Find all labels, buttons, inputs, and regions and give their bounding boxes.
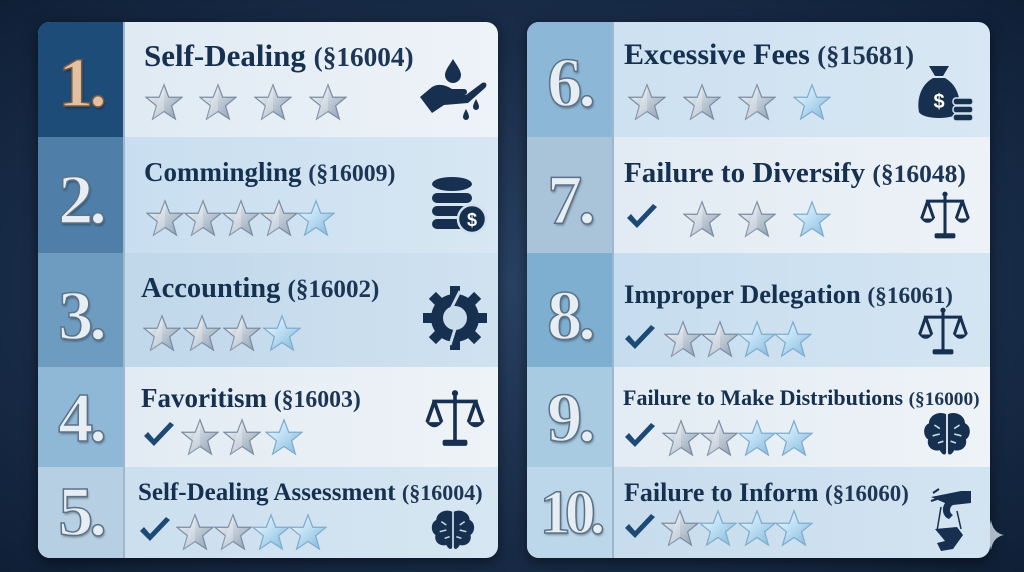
row 3: accounting: Accounting (§16002): [141, 273, 379, 304]
row 9: failure to make distributions: 9.: [547, 380, 592, 457]
row 9: failure to make distributions: [527, 367, 990, 467]
row 4: favoritism: [38, 367, 498, 467]
panel: left list: [38, 22, 498, 558]
row 1: self-dealing: [38, 22, 498, 137]
row 5: self-dealing assessment: 5.: [58, 474, 103, 551]
row 5: self-dealing assessment: Self-Dealing Assessment (§16004): [138, 479, 483, 506]
row 10: failure to inform: [527, 467, 990, 558]
row 8: improper delegation: [527, 253, 990, 367]
row 2: commingling: $: [467, 210, 477, 230]
row 5: self-dealing assessment: [38, 467, 498, 558]
row 3: accounting: 3.: [58, 278, 103, 355]
row 2: commingling: Commingling (§16009): [144, 157, 395, 187]
row 6: excessive fees: 6.: [547, 45, 592, 122]
row 4: favoritism: Favoritism (§16003): [141, 383, 361, 413]
row 8: improper delegation: 8.: [547, 278, 592, 355]
row 10: failure to inform: Failure to Inform (§16060): [624, 478, 909, 507]
decorative sparkle: [990, 520, 1004, 550]
row 1: self-dealing: 1.: [58, 45, 103, 122]
row 6: excessive fees: [527, 22, 990, 137]
row 3: accounting: [38, 253, 498, 367]
row 2: commingling: 2.: [58, 162, 103, 239]
row 7: failure to diversify: Failure to Diversify (§16048): [624, 157, 966, 189]
row 7: failure to diversify: [527, 137, 990, 253]
panel: right list: [527, 22, 990, 558]
row 4: favoritism: 4.: [58, 380, 103, 457]
row 8: improper delegation: Improper Delegation (§16061): [624, 279, 953, 309]
row 6: excessive fees: $: [933, 91, 945, 113]
row 9: failure to make distributions: Failure to Make Distributions (§16000): [623, 385, 980, 410]
row 10: failure to inform: 10.: [540, 479, 599, 547]
row 6: excessive fees: Excessive Fees (§15681): [624, 38, 914, 71]
row 1: self-dealing: Self-Dealing (§16004): [144, 38, 414, 73]
row 7: failure to diversify: 7.: [547, 162, 592, 239]
row 2: commingling: [38, 137, 498, 253]
